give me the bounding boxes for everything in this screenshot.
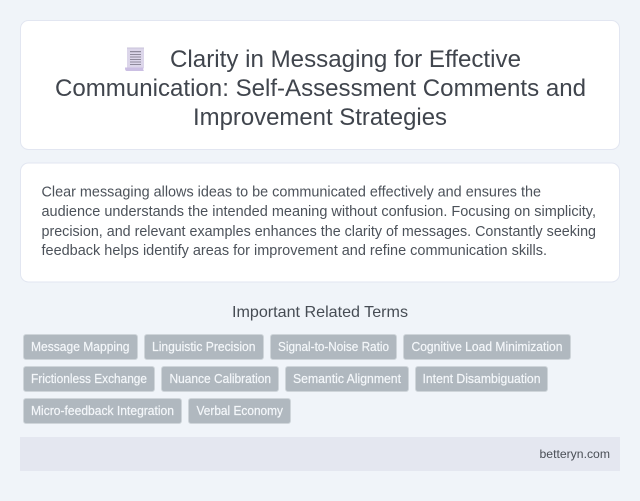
tag: Semantic Alignment: Semantic Alignment	[293, 372, 402, 386]
tag: Message Mapping	[24, 334, 138, 360]
title text: Communication: Self-Assessment Comments and	[55, 75, 586, 102]
panel: description card	[20, 163, 620, 282]
description text: Clear messaging allows ideas to be communicated effectively and ensures the	[42, 184, 541, 200]
description text: feedback helps identify areas for improvement and refine communication skills.	[42, 243, 547, 259]
tag: Signal-to-Noise Ratio: Signal-to-Noise Ratio	[278, 340, 389, 354]
tag: Nuance Calibration	[162, 366, 278, 392]
panel: title card	[20, 20, 620, 150]
tag: Cognitive Load Minimization: Cognitive Load Minimization	[412, 340, 563, 354]
description text: precision, and relevant examples enhances the clarity of messages. Constantly seeking	[42, 224, 596, 240]
tag: Frictionless Exchange	[24, 366, 154, 392]
tag: Intent Disambiguation	[416, 366, 548, 392]
tag: Intent Disambiguation: Intent Disambiguation	[422, 372, 541, 386]
tag: Linguistic Precision	[144, 334, 264, 360]
icon: scroll document	[125, 48, 144, 71]
tag list	[24, 334, 570, 424]
title text	[55, 46, 586, 131]
tag: Message Mapping: Message Mapping	[31, 340, 130, 354]
title text: Improvement Strategies	[193, 104, 447, 131]
description text: audience understands the intended meaning without confusion. Focusing on simplicity,	[42, 204, 596, 220]
tag: Cognitive Load Minimization	[404, 334, 570, 360]
heading: important related terms: Important Related Terms	[232, 304, 408, 321]
tag: Linguistic Precision: Linguistic Precision	[152, 340, 256, 354]
title text: Clarity in Messaging for Effective	[170, 46, 521, 73]
description text	[42, 184, 596, 259]
tag: Verbal Economy: Verbal Economy	[196, 404, 284, 418]
tag: Frictionless Exchange: Frictionless Exchange	[31, 372, 147, 386]
footer bar	[20, 437, 620, 471]
tag: Nuance Calibration: Nuance Calibration	[170, 372, 271, 386]
footer source text: betteryn.com	[540, 447, 610, 461]
tag: Verbal Economy	[188, 398, 290, 424]
tag: Micro-feedback Integration: Micro-feedback Integration	[31, 404, 174, 418]
tag: Signal-to-Noise Ratio	[270, 334, 396, 360]
tag: Micro-feedback Integration	[24, 398, 182, 424]
tag: Semantic Alignment	[286, 366, 408, 392]
